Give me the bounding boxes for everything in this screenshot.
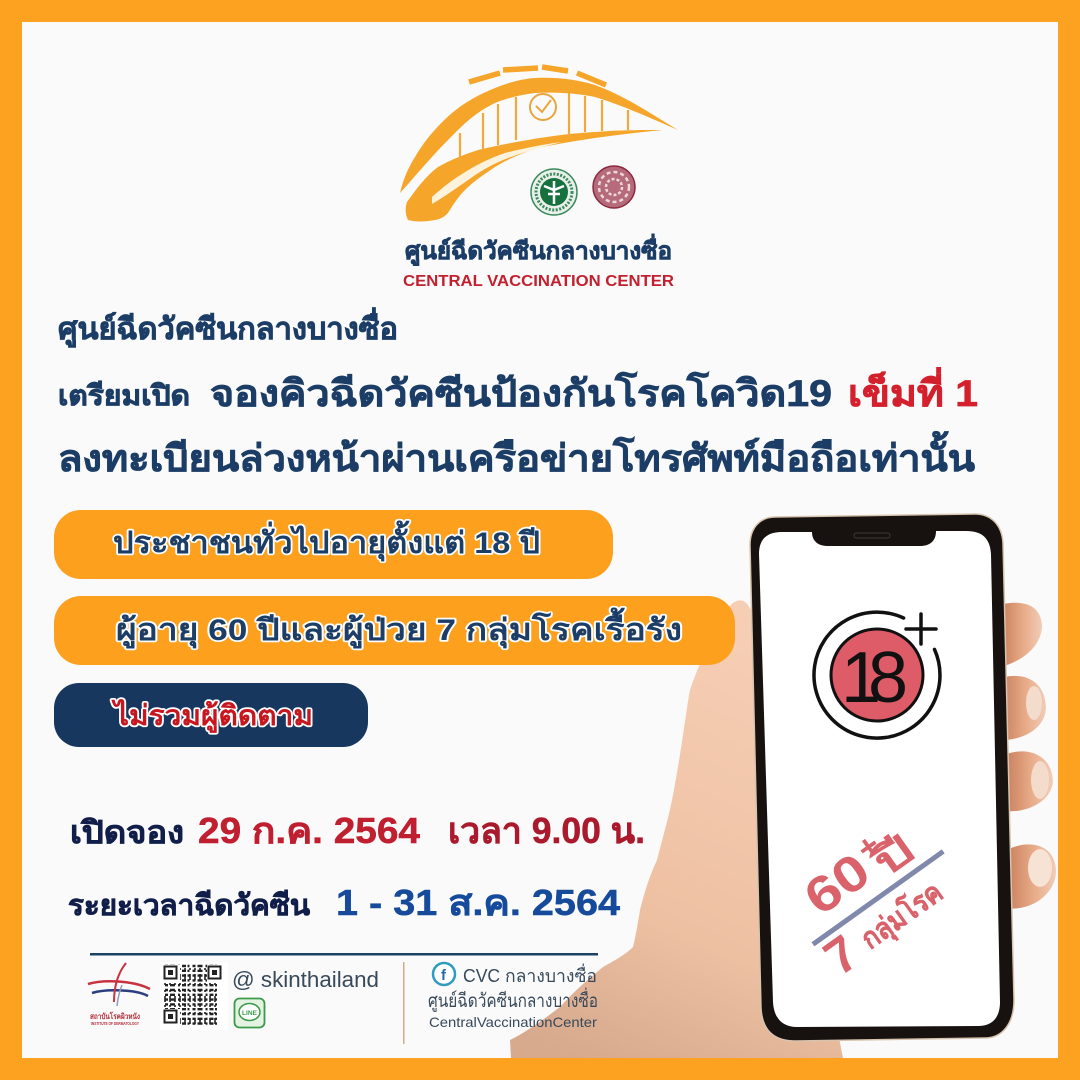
illustration: hand behind phone — [510, 600, 1056, 1058]
phone text: 60+ years / 7 disease groups: กลุ่มโรค — [854, 874, 950, 957]
icon: 18+: 8 — [868, 638, 908, 718]
heading line 3: ลงทะเบียนล่วงหน้าผ่านเครือข่ายโทรศัพท์มือถือเท่านั้น — [58, 431, 975, 479]
heading line 1: ศูนย์ฉีดวัคซีนกลางบางซื่อ — [58, 307, 398, 348]
phone screen — [759, 531, 1000, 1027]
page English name: CentralVaccinationCenter — [429, 1014, 597, 1030]
phone text: 60+ years / 7 disease groups: 60 — [794, 842, 880, 926]
phone text: 60+ years / 7 disease groups: ปี — [864, 827, 922, 887]
pill: excludes followers — [54, 683, 368, 747]
icon: maroon city seal — [593, 166, 635, 208]
pill: elderly and chronic patients — [54, 596, 735, 665]
booking date: เปิดจอง — [70, 815, 184, 850]
logo English name: CENTRAL VACCINATION CENTER — [403, 273, 674, 290]
pill: excludes followers: ไม่รวมผู้ติดตาม — [111, 699, 313, 733]
phone text: 60+ years / 7 disease groups — [794, 826, 950, 986]
phone — [750, 514, 1014, 1041]
vaccination period — [68, 882, 620, 923]
page Thai name: ศูนย์ฉีดวัคซีนกลางบางซื่อ — [428, 987, 598, 1012]
icon: 18+ — [814, 612, 940, 738]
footer — [88, 953, 598, 1044]
pill: elderly and chronic patients: ผู้อายุ 60 ปีและผู้ป่วย 7 กลุ่มโรคเรื้อรัง — [116, 607, 682, 649]
logo Thai name: ศูนย์ฉีดวัคซีนกลางบางซื่อ — [405, 233, 672, 266]
fingers — [995, 603, 1056, 909]
heading line 2: จองคิวฉีดวัคซีนป้องกันโรคโควิด19 — [210, 371, 832, 414]
Facebook page name: CVC กลางบางซื่อ — [463, 963, 597, 986]
QR code — [160, 962, 228, 1030]
booking date: เวลา 9.00 น. — [448, 810, 645, 851]
heading block — [58, 307, 978, 479]
icon: clock — [530, 94, 556, 120]
icon: 18+: 1 — [841, 638, 881, 718]
icon: Facebook: f — [441, 967, 447, 984]
icon: LINE: LINE — [242, 1010, 258, 1017]
icon: institute of dermatology logo: สถาบันโรคผิวหนัง — [90, 1011, 140, 1021]
phone speaker — [854, 533, 890, 538]
vaccination period: 1 - 31 ส.ค. 2564 — [336, 882, 620, 923]
pill: general public — [54, 510, 613, 579]
icon: LINE — [234, 998, 264, 1028]
icon: green ministry seal — [531, 169, 577, 215]
heading line 2: เข็มที่ 1 — [848, 367, 978, 414]
pill: general public: ประชาชนทั่วไปอายุตั้งแต่ 18 ปี — [113, 520, 540, 562]
phone text: 60+ years / 7 disease groups: + — [850, 826, 888, 869]
heading line 2: เตรียมเปิด — [58, 380, 190, 411]
phone text: 60+ years / 7 disease groups: 7 — [814, 924, 869, 986]
icon: Facebook — [433, 963, 455, 985]
icon: institute of dermatology logo: INSTITUTE OF DERMATOLOGY — [91, 1021, 139, 1026]
booking date — [70, 810, 645, 851]
icon: institute of dermatology logo — [88, 963, 150, 1026]
logo: bridge with clock and seals — [400, 67, 678, 290]
vaccination period: ระยะเวลาฉีดวัคซีน — [68, 890, 310, 922]
booking date: 29 ก.ค. 2564 — [198, 810, 420, 851]
heading line 2 — [58, 367, 978, 414]
social handle: @ skinthailand — [232, 967, 379, 992]
